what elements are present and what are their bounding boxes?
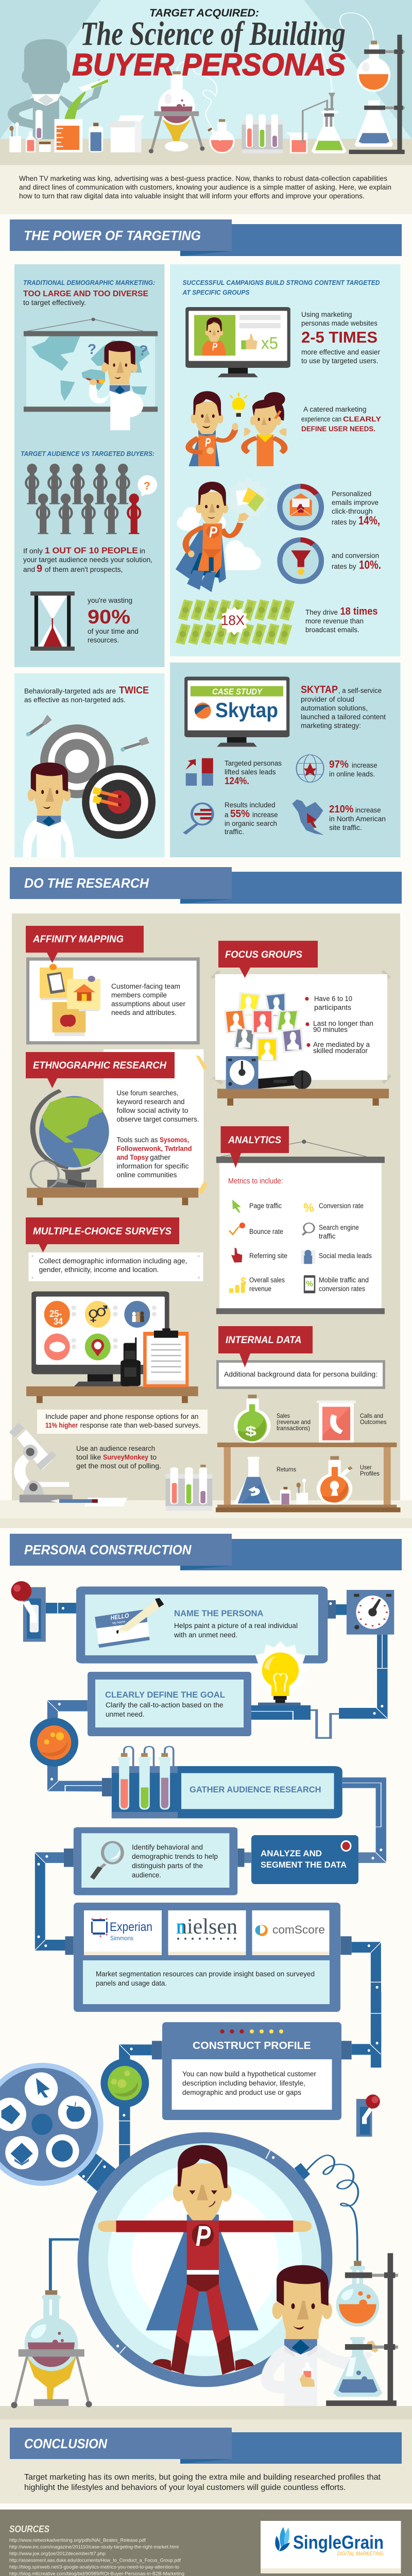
heading: do the research [10, 867, 402, 904]
panel: successful campaigns: A catered marketing [303, 405, 367, 413]
map board with scientist [24, 318, 158, 430]
panel: construct profile: description including behavior, lifestyle, [182, 2079, 305, 2087]
logo: single grain: DIGITAL MARKETING [337, 2551, 384, 2557]
panel: affinity mapping: needs and attributes. [111, 1009, 177, 1016]
panel: gather audience research [112, 1747, 342, 1818]
panel: internal data: Profiles [360, 1470, 380, 1477]
note: response options: Include paper and phone response options for an [45, 1413, 199, 1420]
footer: sources: http://assessment.aas.duke.edu/documents/How_to_Conduct_a_Focus_Group.pdf [9, 2557, 181, 2563]
panel: traditional demographic marketing: TOO LARGE AND TOO DIVERSE [23, 290, 148, 298]
panel: ethnographic research: observe target consumers. [116, 1115, 199, 1123]
panel: multiple-choice surveys: 25- [49, 1309, 62, 1319]
panel: clearly define the goal: Clarify the call-to-action based on the [106, 1701, 224, 1709]
panel: name the persona: with an unmet need. [174, 1631, 237, 1639]
panel: internal data: $ [245, 1423, 256, 1439]
monitor: case study [184, 676, 289, 747]
whiteboard with sticky notes [26, 957, 200, 1044]
panel: case study skytap: Skytap [215, 699, 278, 722]
icon: name tag and marker [95, 1598, 164, 1648]
panel: name the persona: HELLO [110, 1612, 130, 1621]
panel: focus groups: Are mediated by a [313, 1041, 370, 1048]
label: focus groups: FOCUS GROUPS [225, 950, 302, 960]
panel: multiple-choice surveys: SurveyMonkey [103, 1453, 148, 1461]
panel: traditional demographic marketing: ? [138, 342, 149, 359]
panel: analyze and segment the data: SEGMENT THE DATA [261, 1860, 347, 1870]
panel: analytics: Page traffic [249, 1202, 282, 1210]
panel: case study skytap: Targeted personas [225, 759, 282, 767]
wasted time stat: resources. [88, 636, 119, 644]
panel: case study skytap: 210% [329, 804, 354, 815]
panel: successful campaigns: SUCCESSFUL CAMPAIGNS BUILD STRONG CONTENT TARGETED [182, 279, 380, 286]
panel: analytics: $ [241, 1275, 246, 1288]
panel: ethnographic research: Use forum searches, [116, 1089, 178, 1097]
panel: market segmentation resources: panels and usage data. [96, 1979, 167, 1987]
panel: ethnographic research: follow social activity to [116, 1107, 188, 1114]
panel: name the persona: NAME THE PERSONA [174, 1609, 264, 1618]
panel: analytics [216, 1126, 385, 1314]
conclusion text: Target marketing has its own merits, but going the extra mile and building researched profiles that [24, 2473, 381, 2482]
white tubes [177, 13, 374, 129]
panel: case study skytap: 97% [329, 759, 349, 770]
test tube rack [242, 114, 283, 154]
panel: internal data [216, 1326, 401, 1512]
panel: successful campaigns: DEFINE USER NEEDS. [301, 425, 375, 433]
panel: successful campaigns: x5 [261, 334, 278, 352]
label: multiple-choice surveys: MULTIPLE-CHOICE SURVEYS [33, 1226, 171, 1237]
logo card: experian: Simmons [110, 1935, 133, 1942]
panel: clearly define the goal [88, 1672, 251, 1736]
panel: affinity mapping: members compile [111, 991, 167, 999]
panel: case study skytap: CASE STUDY [212, 687, 263, 697]
flying hero with emails [176, 477, 270, 592]
label: internal data: INTERNAL DATA [226, 1335, 302, 1346]
hourglass [30, 591, 75, 651]
note: response options [37, 1410, 208, 1434]
gauge [347, 1590, 394, 1635]
heading: persona construction: PERSONA CONSTRUCTION [24, 1542, 192, 1557]
label: ethnographic research: ETHNOGRAPHIC RESEARCH [33, 1060, 167, 1071]
panel: focus groups: skilled moderator [313, 1047, 368, 1055]
panel: case study skytap: in organic search [225, 820, 277, 827]
panel: successful campaigns: click-through [332, 507, 373, 515]
title [72, 7, 346, 82]
label: multiple-choice surveys [26, 1217, 179, 1252]
panel: analytics: Search engine [319, 1224, 359, 1231]
panel: case study skytap: launched a tailored content [301, 713, 386, 721]
monitor with persona [185, 307, 290, 377]
panel: case study skytap: Results included [225, 801, 275, 809]
panel: analytics: Social media leads [319, 1252, 372, 1260]
left heated flask [11, 2290, 92, 2408]
machine pipes, middle section [35, 1777, 386, 2067]
targets, arrows and scientist [23, 715, 156, 857]
lever switch right [356, 2094, 380, 2137]
panel: analyze and segment the data [251, 1835, 358, 1884]
persona wheel with icons [0, 2063, 104, 2186]
panel: analytics: conversion rates [319, 1285, 365, 1293]
conclusion text: highlight the lifestyles and behaviors of your loyal customers will guide countless efforts. [24, 2483, 346, 2492]
taped sheet with photos, timer and microphone [211, 970, 391, 1106]
donut: click-through rate [277, 484, 324, 531]
note: collect demographics [29, 1252, 203, 1281]
panel: successful campaigns: broadcast emails. [305, 626, 359, 634]
panel: focus groups [211, 941, 391, 1106]
heading: the power of targeting: THE POWER OF TARGETING [24, 228, 201, 243]
panel: case study skytap [170, 663, 401, 857]
panel: construct profile: CONSTRUCT PROFILE [193, 2040, 311, 2052]
bench and lab base [0, 2406, 412, 2503]
clamp stand with flasks [349, 35, 405, 154]
silhouette scientist [8, 39, 102, 139]
panel: gather audience research: GATHER AUDIENCE RESEARCH [190, 1785, 321, 1794]
panel: successful campaigns: more effective and easier [301, 348, 381, 356]
wasted time stat: you're wasting [88, 597, 132, 604]
panel: construct profile [162, 2022, 341, 2120]
panel: analytics: % [303, 1201, 314, 1215]
panel: focus groups: Last no longer than [313, 1020, 373, 1027]
panel: affinity mapping [26, 926, 200, 1044]
donut: conversion rate [277, 537, 324, 584]
panel: internal data: Sales [277, 1412, 290, 1419]
panel: clearly define the goal: CLEARLY DEFINE THE GOAL [105, 1690, 225, 1700]
panel: case study skytap: a [225, 811, 229, 819]
hero in chamber [50, 2132, 358, 2387]
panel: case study skytap: increase [252, 811, 278, 819]
wasted time stat: of your time and [88, 628, 139, 635]
panel: behaviorally-targeted ads: Behaviorally-targeted ads are [24, 687, 116, 695]
panel: multiple-choice surveys: get the most out of polling. [76, 1462, 161, 1470]
panel: case study skytap: lifted sales leads [225, 768, 276, 776]
panel: ethnographic research: online communities [116, 1171, 177, 1179]
beaker and erlenmeyer with condenser [286, 93, 346, 154]
panel: successful campaigns: 14%, [358, 514, 380, 527]
footer: sources: http://www.joe.org/joe/2012december/tt7.php [9, 2551, 106, 2556]
intro text [19, 175, 391, 200]
panel: successful campaigns: They drive [305, 608, 338, 616]
icon: light bulb [251, 1641, 310, 1703]
note: response options: response rate than web-based surveys. [80, 1421, 201, 1429]
panel: successful campaigns: experience can [301, 415, 341, 423]
panel: internal data: Outcomes [360, 1418, 386, 1426]
machine pipes, lower section [78, 1992, 381, 2191]
note: collect demographics: gender, ethnicity, income and location. [39, 1266, 159, 1274]
panel: case study skytap: in online leads. [329, 770, 375, 778]
panel: ethnographic research: gather [150, 1154, 171, 1161]
panel: traditional demographic marketing: to target effectively. [23, 299, 86, 307]
heading: the power of targeting [10, 219, 402, 256]
panel: case study skytap: in North American [329, 815, 386, 823]
logo card: nielsen: nielsen [176, 1915, 237, 1939]
panel: analytics: Conversion rate [319, 1202, 364, 1210]
logo card: nielsen: n [176, 1915, 185, 1939]
panel: name the persona: My Name [112, 1620, 126, 1625]
panel: ethnographic research: Followerwonk, Twtrland [116, 1145, 192, 1153]
panel: multiple-choice surveys: Use an audience research [76, 1445, 155, 1452]
label: affinity mapping: AFFINITY MAPPING [32, 934, 124, 945]
logo card: experian: Experian [110, 1920, 152, 1934]
label: focus groups [218, 941, 318, 978]
money stacks with 18x badge [176, 599, 295, 645]
target audience vs targeted buyers: ? [144, 480, 150, 492]
panel: successful campaigns: 10%. [359, 558, 381, 571]
panel: case study skytap: site traffic. [329, 824, 362, 832]
panel: case study skytap: automation solutions, [301, 704, 368, 712]
panel: traditional demographic marketing [14, 264, 165, 667]
panel: successful campaigns: personas made websites [301, 319, 377, 327]
wasted time stat: 90% [88, 606, 130, 628]
panel: successful campaigns: P [212, 341, 218, 353]
panel: clearly define the goal: unmet need. [106, 1710, 144, 1718]
round flask on stand [149, 71, 204, 154]
heading: do the research: DO THE RESEARCH [24, 875, 149, 891]
panel: affinity mapping: Customer-facing team [111, 982, 180, 990]
target audience vs targeted buyers: If only [23, 547, 43, 555]
panel: multiple-choice surveys: 34 [54, 1316, 63, 1327]
panel: analytics: Overall sales [249, 1276, 285, 1284]
target audience vs targeted buyers: and [23, 566, 35, 573]
intro text: When TV marketing was king, advertising was a best-guess practice. Now, thanks to robust data-collection capabilities [19, 175, 387, 182]
panel: internal data: Calls and [360, 1412, 383, 1419]
text: P [196, 2219, 211, 2252]
note: response options: 11% higher [45, 1421, 78, 1429]
label: analytics [220, 1126, 289, 1168]
icon: test tubes [118, 1747, 174, 1810]
panel: multiple-choice surveys [9, 1217, 212, 1511]
wasted time stat [88, 597, 139, 644]
label: affinity mapping [26, 926, 144, 963]
panel: analytics: % [306, 1280, 313, 1289]
scientist with flasks and clamp stand [261, 2253, 398, 2406]
logo: single grain [261, 2521, 401, 2573]
panel: analyze and segment the data: ANALYZE AND [261, 1849, 322, 1858]
panel: market segmentation resources [74, 1903, 340, 2012]
footer: sources [0, 2510, 412, 2576]
target audience vs targeted buyers: 1 OUT OF 10 PEOPLE [45, 546, 138, 555]
lever switch left [11, 1581, 46, 1642]
logo card: experian [84, 1910, 162, 1955]
panel: case study skytap: marketing strategy: [301, 722, 361, 730]
panel: multiple-choice surveys: to [150, 1453, 157, 1461]
panel: case study skytap: 55% [230, 808, 250, 820]
label: internal data [218, 1326, 313, 1367]
left bottles and beakers [9, 110, 145, 152]
intro text: and direct lines of communication with customers, knowing your audience is a simple matter of asking. Here, we explain [19, 183, 391, 191]
panel: focus groups: Have 6 to 10 [314, 995, 352, 1003]
heading: conclusion [10, 2428, 402, 2464]
panel: case study skytap: , a self-service [338, 687, 382, 694]
panel: case study skytap: traffic. [225, 828, 244, 836]
panel: construct profile: You can now build a hypothetical customer [182, 2070, 317, 2078]
sheet, globe and shelf [27, 1049, 208, 1205]
panel: behaviorally-targeted ads: as effective as non-targeted ads. [24, 696, 126, 704]
title: The Science of Building [80, 15, 346, 53]
hanging board with metric icons [216, 1140, 385, 1314]
monitor with survey icons, phone and clipboard [26, 1292, 198, 1403]
panel: focus groups: participants [314, 1004, 351, 1011]
panel: identify trends: demographic trends to help [132, 1853, 218, 1860]
panel: case study skytap: 124%. [225, 776, 249, 787]
target audience vs targeted buyers: TARGET AUDIENCE VS TARGETED BUYERS: [21, 450, 154, 457]
target audience vs targeted buyers [21, 450, 157, 574]
panel: ethnographic research: and Topsy [116, 1154, 149, 1161]
panel: successful campaigns: emails improve [332, 499, 379, 506]
panel: traditional demographic marketing: TRADITIONAL DEMOGRAPHIC MARKETING: [23, 279, 155, 286]
side-arm flask [208, 119, 235, 154]
panel: internal data: (revenue and [277, 1418, 311, 1426]
panel: case study skytap: increase [352, 761, 377, 769]
panel: analytics: Bounce rate [249, 1228, 283, 1235]
panel: behaviorally-targeted ads [14, 673, 165, 857]
target audience vs targeted buyers: of them aren't prospects, [45, 566, 123, 573]
panel: successful campaigns: P [209, 523, 217, 541]
target audience vs targeted buyers: in [140, 547, 145, 555]
footer: sources: http://www.inc.com/magazine/201110/case-study-targeting-the-right-market.html [9, 2544, 179, 2550]
panel: case study skytap: SKYTAP [301, 684, 338, 696]
panel: successful campaigns: CLEARLY [343, 415, 381, 423]
panel: ethnographic research [26, 1049, 208, 1205]
panel: identify trends [74, 1827, 237, 1895]
stat icons [183, 755, 324, 835]
people icons: ten with one highlighted [26, 464, 157, 534]
label: analytics: ANALYTICS [228, 1135, 281, 1146]
panel: successful campaigns: Using marketing [301, 311, 352, 318]
panel: ethnographic research: Tools such as [116, 1136, 158, 1144]
panel: market segmentation resources: Market segmentation resources can provide insight based on surveyed [96, 1970, 315, 1978]
panel: successful campaigns: and conversion [332, 552, 379, 560]
panel: behaviorally-targeted ads: TWICE [119, 685, 149, 696]
panel: successful campaigns: 2-5 TIMES [301, 328, 377, 346]
panel: ethnographic research: Sysomos, [160, 1136, 189, 1144]
data note box [216, 1360, 385, 1389]
panel: traditional demographic marketing: ? [88, 341, 96, 357]
panel: successful campaigns: rates by [332, 563, 356, 570]
shelf with data flasks [216, 1395, 401, 1512]
panel: focus groups: 90 minutes [313, 1026, 348, 1033]
icon: magnifying glass [90, 1842, 123, 1879]
panel: case study skytap: increase [355, 806, 381, 814]
microscope, pen and rack [9, 1423, 212, 1511]
panel: internal data: transactions) [277, 1425, 310, 1432]
panel: name the persona [76, 1586, 328, 1664]
panel: multiple-choice surveys: tool like [76, 1453, 101, 1461]
panel: identify trends: distinguish parts of the [132, 1862, 203, 1870]
panel: internal data: Returns [277, 1466, 296, 1473]
panel: analytics: traffic [319, 1232, 336, 1240]
panel: successful campaigns: 18 times [340, 606, 378, 617]
note: collect demographics: Collect demographic information including age, [39, 1257, 187, 1265]
panel: analytics: Mobile traffic and [319, 1276, 369, 1284]
panel: ethnographic research: information for specific [116, 1162, 189, 1170]
title: BUYER PERSONAS [72, 47, 346, 82]
intro text: how to turn that raw digital data into valuable insight that will inform your efforts and improve your operations. [19, 192, 365, 200]
panel: successful campaigns: P [205, 436, 211, 450]
panel: name the persona: Helps paint a picture of a real individual [174, 1622, 298, 1630]
heading: conclusion: CONCLUSION [24, 2436, 108, 2451]
logo card: comscore: comScore [272, 1923, 325, 1936]
header lab illustration [0, 0, 412, 214]
research section background [0, 913, 412, 1528]
panel: identify trends: audience. [132, 1871, 161, 1879]
logo card: nielsen [168, 1910, 246, 1955]
conclusion text [24, 2473, 381, 2492]
panel: successful campaigns: 18X [221, 613, 245, 628]
target audience vs targeted buyers: 9 [37, 563, 42, 574]
pouring test tube [64, 78, 109, 120]
panel: successful campaigns [170, 264, 401, 656]
panel: ethnographic research: keyword research and [116, 1098, 184, 1106]
label: ethnographic research [26, 1052, 175, 1088]
title: TARGET ACQUIRED: [149, 7, 259, 19]
panel: analytics: Metrics to include: [228, 1177, 283, 1185]
panel: successful campaigns: Personalized [332, 490, 371, 498]
footer: sources: http://blog.spinweb.net/3-google-analytics-metrics-you-need-to-pay-attention-to [9, 2564, 179, 2570]
panel: construct profile: demographic and product use or gaps [182, 2089, 301, 2096]
panel: case study skytap: provider of cloud [301, 696, 354, 703]
footer: sources: http://www.networkadvertising.org/pdfs/NAI_Beales_Release.pdf [9, 2537, 146, 2543]
logo: single grain: SingleGrain [293, 2532, 384, 2553]
panel: identify trends: Identify behavioral and [132, 1843, 203, 1851]
panel: successful campaigns: rates by [332, 518, 356, 526]
data note box: Additional background data for persona building: [224, 1370, 377, 1378]
panel: analytics: revenue [249, 1285, 271, 1293]
panel: successful campaigns: more revenue than [305, 617, 364, 625]
target audience vs targeted buyers: your target audience needs your solution, [23, 556, 152, 564]
pair of personas with idea bulb [188, 391, 286, 466]
panel: successful campaigns: to use by targeted users. [301, 357, 378, 365]
panel: analytics: Referring site [249, 1252, 287, 1260]
panel: internal data: User [360, 1464, 372, 1471]
footer: sources: SOURCES [9, 2524, 49, 2534]
logo card: comscore [252, 1910, 330, 1955]
machine pipes, upper section [30, 1600, 388, 1791]
panel: affinity mapping: assumptions about user [111, 1000, 185, 1008]
panel: successful campaigns: AT SPECIFIC GROUPS [182, 289, 250, 296]
heading: persona construction [10, 1534, 402, 1570]
